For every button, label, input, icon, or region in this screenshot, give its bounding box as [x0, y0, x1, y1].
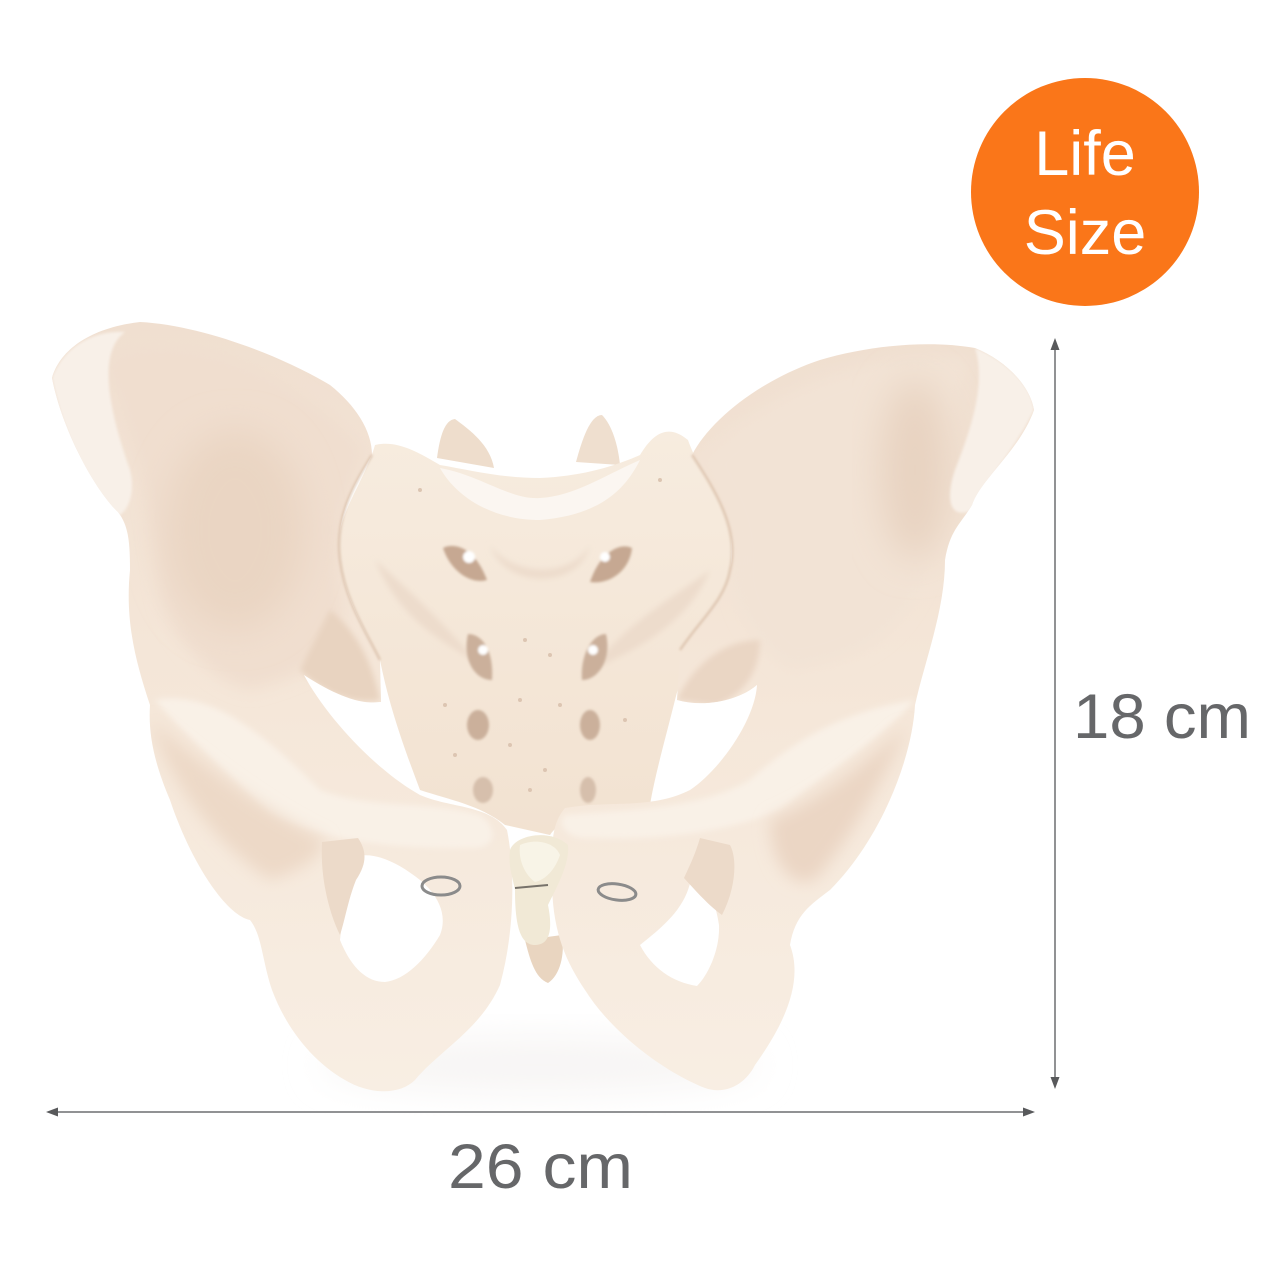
- right iliac crest highlight: [950, 348, 1034, 513]
- right acetabulum shadow: [768, 740, 898, 884]
- sacrum central ridge shading: [375, 545, 710, 670]
- left greater sciatic opening: [304, 675, 421, 793]
- left rear ischium: [322, 838, 364, 935]
- sacrum superior surface: [440, 460, 640, 520]
- sacral foramina: [443, 546, 632, 803]
- right rear ischium: [684, 838, 734, 915]
- right obturator opening: [640, 870, 719, 986]
- right pubic ramus highlight: [562, 700, 915, 838]
- height dimension arrow: [1050, 338, 1060, 1089]
- left obturator opening: [340, 855, 443, 982]
- left acetabulum shadow: [158, 734, 322, 880]
- sacroiliac joint lines: [339, 455, 732, 660]
- pubic symphysis cartilage: [509, 835, 568, 945]
- left ilium fossa shading: [198, 622, 318, 681]
- width dimension arrow: [46, 1108, 1035, 1116]
- coccyx: [525, 935, 563, 983]
- life size badge: Life: [1034, 119, 1136, 189]
- sacrum pits: [418, 478, 662, 792]
- pelvis model: [52, 322, 1034, 1091]
- life size badge: Size: [1024, 198, 1146, 268]
- life size badge: [971, 78, 1199, 306]
- floor shadow: [320, 1037, 760, 1093]
- posterior sacral spines: [437, 415, 620, 468]
- left pubic ramus highlight: [155, 698, 492, 848]
- right metal ring: [597, 881, 637, 903]
- height label: 18 cm: [1073, 682, 1251, 752]
- width label: 26 cm: [448, 1132, 633, 1202]
- right ilium fossa shading: [700, 356, 970, 670]
- right greater sciatic opening: [655, 685, 757, 790]
- left hip bone: [52, 322, 512, 1091]
- right hip bone: [552, 344, 1034, 1090]
- left metal ring: [422, 877, 460, 895]
- left iliac crest highlight: [52, 332, 132, 516]
- sacrum: [338, 432, 732, 835]
